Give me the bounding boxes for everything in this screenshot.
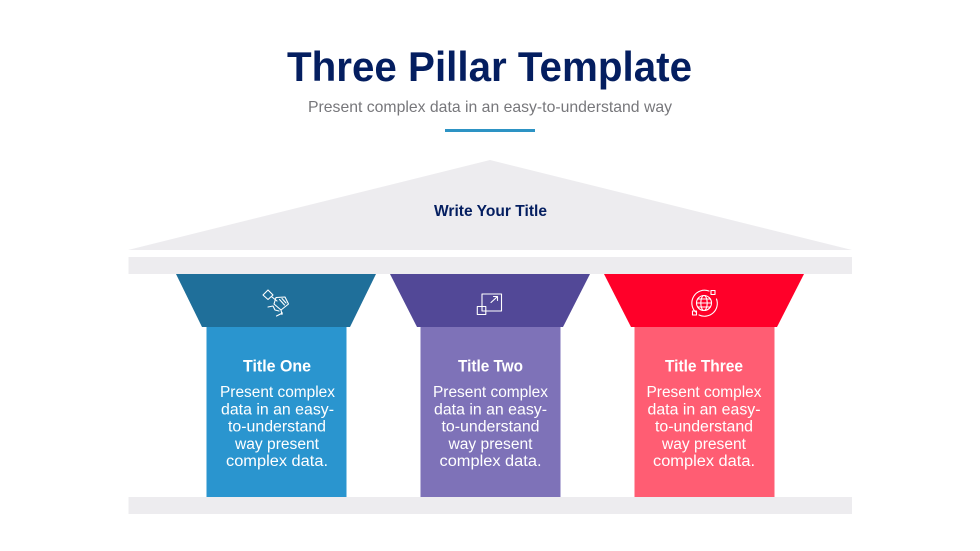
pillar three body text: to-understand	[655, 418, 753, 436]
pillar three body text	[646, 384, 762, 470]
pillar one heading: Title One	[243, 356, 311, 376]
title underline accent	[445, 129, 535, 132]
pillar one body text: Present complex	[220, 384, 335, 401]
title: Three Pillar Template	[287, 43, 692, 90]
pillar three body text: data in an easy-	[648, 402, 760, 418]
pillar three heading: Title Three	[665, 356, 743, 376]
pillar two shaft	[420, 327, 560, 497]
pillar three	[604, 274, 804, 497]
pillar one body text: data in an easy-	[221, 402, 334, 418]
pillar two heading: Title Two	[458, 356, 523, 376]
pillar three capital	[604, 274, 804, 327]
pillar three body text: Present complex	[646, 384, 762, 401]
pillar three body text: complex data.	[653, 453, 755, 470]
pillar three shaft	[634, 327, 774, 497]
icon: resize squares	[477, 294, 502, 314]
pillar two	[390, 274, 590, 497]
pillar one shaft	[206, 327, 346, 497]
pillar two body text: complex data.	[440, 453, 542, 470]
entablature bar	[128, 257, 852, 274]
pillar three body text: way present	[661, 436, 747, 453]
roof pediment with title	[128, 160, 852, 250]
pillar one capital	[176, 274, 376, 327]
pillar two body text: data in an easy-	[434, 402, 547, 418]
pillar two body text: way present	[447, 436, 533, 453]
pillar one body text: complex data.	[226, 453, 328, 470]
base bar	[128, 497, 852, 514]
icon: hand holding flag	[263, 290, 288, 316]
pillar one body text: way present	[234, 436, 320, 453]
pillar one body text: to-understand	[228, 418, 326, 436]
pillar one body text	[220, 384, 335, 470]
pillar one	[176, 274, 376, 497]
pillar two capital	[390, 274, 590, 327]
icon: globe with orbit	[692, 290, 717, 316]
subtitle: Present complex data in an easy-to-understand way	[308, 99, 672, 116]
pillar two body text: Present complex	[433, 384, 548, 401]
roof title: Write Your Title	[434, 203, 547, 220]
pillar two body text	[433, 384, 548, 470]
pillar two body text: to-understand	[442, 418, 540, 436]
